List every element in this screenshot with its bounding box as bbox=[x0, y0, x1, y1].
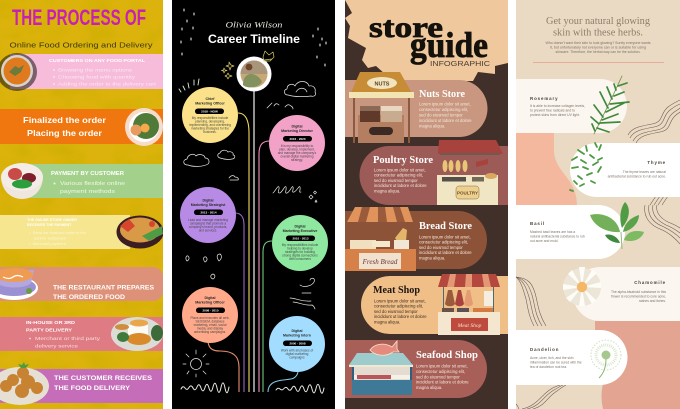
doodles bbox=[179, 9, 326, 393]
store band: nuts store: magna aliqua. bbox=[419, 124, 445, 128]
herb card: rosemary: protect skins from direct UV light. bbox=[530, 113, 580, 117]
herb card: basil bbox=[516, 202, 644, 259]
heading: career timeline: Career Timeline bbox=[208, 32, 300, 46]
circle: marketing strategist: Marketing Strategist bbox=[191, 203, 226, 207]
title: store guide: INFOGRAPHIC bbox=[430, 59, 491, 68]
store band: bread store bbox=[345, 207, 487, 271]
herb card: rosemary bbox=[516, 76, 629, 134]
store band: seafood shop: consectetur adipiscing elit, bbox=[416, 369, 465, 374]
circle: marketing officer: media, and display bbox=[197, 326, 224, 330]
icon: rosemary bbox=[591, 76, 629, 134]
nuts stall bbox=[349, 72, 414, 143]
store band: nuts store bbox=[345, 72, 488, 143]
circle: marketing director: and manage the company's bbox=[278, 151, 317, 155]
circle: marketing strategist: 2013 - 2014 bbox=[200, 210, 217, 214]
circle: marketing director: It is my responsibility to bbox=[281, 144, 313, 148]
step 3: payment by customer: Various flexible online bbox=[60, 181, 125, 187]
circle: marketing strategist bbox=[180, 187, 236, 243]
circle: marketing executive: Digital bbox=[295, 224, 305, 228]
store band: bread store: magna aliqua. bbox=[419, 256, 445, 260]
herb card: dandelion: Acne, ulcer, itch, and the skin bbox=[530, 356, 574, 360]
circle: marketing intern: Digital bbox=[292, 329, 302, 333]
circle: marketing executive: strategies for building bbox=[285, 250, 315, 254]
step 4: online store receives payment: RECEIVES THE PAYMENT bbox=[27, 223, 72, 227]
title: store guide: guide bbox=[410, 25, 488, 65]
step 7: the customer receives the food delivery: THE FOOD DELIVERY bbox=[54, 385, 131, 392]
herb card: dandelion: Dandelion bbox=[530, 347, 559, 352]
circle: marketing intern: Marketing Intern bbox=[283, 334, 311, 338]
store band: meat shop bbox=[361, 274, 508, 335]
store band: poultry store: magna aliqua. bbox=[374, 188, 400, 194]
herb card: chamomile: flower is recommended to cure acne, bbox=[611, 294, 666, 298]
circle: chief marketing officer: Marketing Officer bbox=[195, 102, 225, 106]
herb card: basil: Mashed basil leaves are has a bbox=[530, 230, 575, 234]
step 2: finalized the order: Placing the order bbox=[27, 128, 103, 138]
step 6: in-house or third party delivery bbox=[0, 317, 163, 351]
step 1: customers on any food portal: Browsing the menu options bbox=[58, 68, 133, 72]
circle: marketing executive: 2010 - 2013 bbox=[292, 236, 309, 240]
step 4: online store receives payment: • Send the finalized order to the bbox=[29, 230, 87, 235]
herb card: chamomile bbox=[563, 267, 680, 321]
store band: nuts store: Lorem ipsum dolor sit amet, bbox=[419, 102, 471, 106]
peach shape bbox=[516, 133, 577, 207]
circle: marketing intern: 2000 - 2008 bbox=[289, 342, 306, 346]
meat stall: Meat Shop bbox=[457, 323, 482, 329]
store band: bread store: Lorem ipsum dolor sit amet, bbox=[419, 234, 471, 240]
step 7: the customer receives the food delivery bbox=[0, 362, 163, 405]
step 4: online store receives payment: partner restaurant bbox=[34, 236, 67, 240]
circle: marketing executive: helping to develop bbox=[287, 246, 313, 250]
bread stall bbox=[345, 207, 416, 271]
store band: poultry store bbox=[360, 140, 508, 205]
store band: poultry store: consectetur adipiscing elit, bbox=[374, 172, 423, 178]
step 1: customers on any food portal: Adding the order to the delivery cart bbox=[58, 82, 157, 86]
step 7: the customer receives the food delivery: THE CUSTOMER RECEIVES bbox=[54, 375, 152, 382]
circle: marketing intern: Work with all phases of bbox=[281, 348, 313, 352]
herb card: chamomile: Chamomile bbox=[634, 280, 666, 285]
herb card: basil: out acne and mold. bbox=[530, 239, 559, 243]
store band: poultry store: Poultry Store bbox=[373, 155, 433, 166]
panel: online food ordering process bbox=[0, 0, 164, 409]
step 2: finalized the order: Finalized the order bbox=[23, 115, 107, 125]
circle: marketing strategist: and services. bbox=[199, 228, 217, 232]
salmon block bbox=[595, 321, 680, 409]
herb card: rosemary: It is able to increase collagen levels, bbox=[530, 104, 585, 108]
circle: marketing strategist: Digital bbox=[203, 198, 213, 202]
store band: poultry store: incididunt ut labore et dolore bbox=[374, 183, 427, 188]
step 6: in-house or third party delivery: IN-HOUSE OR 3RD bbox=[26, 320, 76, 325]
icon: dandelion bbox=[591, 340, 621, 378]
store band: seafood shop: Seafood Shop bbox=[416, 350, 478, 361]
herb card: chamomile: The alpha-bisabolol substance in this bbox=[611, 290, 666, 294]
store band: nuts store: incididunt ut labore et dolore bbox=[419, 118, 472, 123]
herb card: thyme bbox=[570, 143, 680, 197]
poultry stall: POULTRY bbox=[457, 190, 478, 196]
store band: bread store: Bread Store bbox=[419, 221, 472, 232]
herb card: rosemary: to prevent free radicals and to bbox=[530, 108, 575, 112]
herb card: thyme: The thyme leaves are natural bbox=[623, 170, 666, 174]
wavy lines bbox=[516, 100, 680, 409]
circle: marketing intern: digital marketing bbox=[286, 352, 309, 356]
store band: nuts store: Nuts Store bbox=[419, 89, 465, 100]
timeline lines bbox=[208, 90, 298, 392]
circle: marketing executive: My responsibilities include bbox=[282, 243, 318, 247]
store band: seafood shop: incididunt ut labore et dolore bbox=[416, 380, 469, 384]
title: the process of: THE PROCESS OF bbox=[12, 5, 146, 30]
herb card: basil: natural antibacterial substance to rub bbox=[530, 234, 585, 238]
circle: marketing officer: Marketing Officer bbox=[195, 300, 225, 304]
peach torn header bbox=[345, 0, 508, 81]
circle: marketing director: 2016 - 2020 bbox=[289, 137, 306, 141]
circle: marketing officer: 2008 - 2010 bbox=[202, 308, 219, 312]
herb card: rosemary: Rosemary bbox=[530, 96, 558, 101]
circle: marketing director bbox=[269, 115, 325, 171]
name script: Olivia Wilson bbox=[226, 20, 282, 30]
circle: marketing intern bbox=[269, 316, 325, 372]
step 6: in-house or third party delivery: delivery service bbox=[35, 344, 78, 350]
step 3: payment by customer bbox=[1, 163, 163, 199]
step 1: customers on any food portal: Choosing food with quantity bbox=[58, 74, 136, 80]
herb card: dandelion bbox=[516, 330, 628, 385]
store band: bread store: consectetur adipiscing elit, bbox=[419, 240, 468, 244]
circle: chief marketing officer bbox=[182, 87, 238, 143]
nuts stall: NUTS bbox=[375, 82, 390, 88]
store band: meat shop: sed do eiusmod tempor bbox=[374, 309, 418, 314]
circle: marketing director: Digital bbox=[292, 124, 302, 128]
step 6: in-house or third party delivery: PARTY DELIVERY bbox=[26, 328, 72, 332]
herb card: dandelion: tea of dandelion root tea. bbox=[530, 365, 567, 369]
bread stall: Fresh Bread bbox=[362, 258, 398, 266]
store band: nuts store: consectetur adipiscing elit, bbox=[419, 107, 468, 112]
heading: skin with these herbs. bbox=[553, 28, 643, 38]
step 4: online store receives payment: • Merchant payment bbox=[29, 241, 67, 246]
store band: seafood shop bbox=[345, 340, 487, 398]
intro text bbox=[546, 41, 651, 54]
herb card: chamomile: rashes and itches. bbox=[639, 299, 666, 303]
circle: marketing officer: Digital bbox=[205, 296, 215, 300]
circle: marketing executive: Marketing Executive bbox=[283, 229, 317, 233]
circle: marketing officer: SEO/SEM, database bbox=[196, 320, 225, 324]
step 5: the restaurant prepares the ordered food: THE ORDERED FOOD bbox=[53, 294, 126, 301]
title: store guide: store bbox=[369, 11, 443, 44]
portrait bbox=[236, 56, 272, 92]
store band: seafood shop: sed do eiusmod tempor bbox=[416, 374, 460, 380]
step 5: the restaurant prepares the ordered food: THE RESTAURANT PREPARES bbox=[53, 284, 154, 292]
herb card: basil: Basil bbox=[530, 221, 545, 226]
circle: chief marketing officer: planning, developing, bbox=[195, 120, 225, 124]
meat stall bbox=[438, 274, 500, 335]
circle: marketing officer bbox=[182, 287, 238, 343]
circle: chief marketing officer: implementing, and overseeing bbox=[189, 123, 231, 127]
circle: marketing director: strategy. bbox=[291, 158, 303, 162]
intro text: Who doesn't want their skin to look glowing? Surely everyone wants bbox=[546, 41, 651, 45]
store band: meat shop: magna aliqua. bbox=[374, 320, 400, 324]
circle: chief marketing officer: business. bbox=[203, 130, 217, 134]
circle: chief marketing officer: My responsibilities include bbox=[192, 116, 228, 120]
seafood stall bbox=[349, 341, 413, 395]
step 4: online store receives payment: THE ONLINE STORE OWNER bbox=[27, 218, 77, 222]
title: store guide bbox=[369, 11, 491, 68]
circle: marketing intern: campaigns bbox=[289, 356, 305, 360]
circle: marketing officer: marketing, email, social bbox=[194, 323, 227, 327]
store band: bread store: sed do eiusmod tempor bbox=[419, 245, 463, 250]
step 3: payment by customer: PAYMENT BY CUSTOMER bbox=[51, 171, 124, 177]
circle: marketing director: Marketing Director bbox=[281, 129, 313, 133]
store band: poultry store: sed do eiusmod tempor bbox=[374, 178, 418, 183]
icon: thyme bbox=[570, 143, 602, 191]
circle: marketing director: overall digital marketing bbox=[280, 154, 314, 158]
circle: marketing officer: Plans and executes all web, bbox=[191, 316, 230, 320]
step 1: customers on any food portal bbox=[0, 53, 163, 91]
store band: poultry store: Lorem ipsum dolor sit amet, bbox=[374, 168, 426, 172]
store band: nuts store: sed do eiusmod tempor bbox=[419, 112, 463, 118]
poultry stall bbox=[437, 140, 503, 205]
store band: meat shop: Lorem ipsum dolor sit amet, bbox=[374, 298, 426, 304]
circle: marketing strategist: company's brand, products, bbox=[189, 225, 227, 229]
herb card: thyme: Thyme bbox=[647, 160, 666, 165]
circle: marketing executive: strong digital connections bbox=[282, 254, 318, 258]
circle: chief marketing officer: marketing strategies for the bbox=[191, 126, 229, 130]
circle: chief marketing officer: 2018 - NOW bbox=[201, 110, 218, 114]
step 5: the restaurant prepares the ordered food bbox=[0, 267, 163, 301]
circle: marketing executive: with consumers bbox=[289, 257, 311, 261]
store band: meat shop: Meat Shop bbox=[373, 285, 420, 296]
circle: marketing executive bbox=[272, 215, 328, 271]
heading bbox=[546, 16, 651, 38]
circle: marketing strategist: Lead and manage marketing bbox=[188, 218, 228, 222]
store band: meat shop: incididunt ut labore et dolore bbox=[374, 314, 427, 319]
herb card: dandelion: inflammation can be cured with the bbox=[530, 360, 582, 364]
store band: seafood shop: magna aliqua. bbox=[416, 385, 442, 390]
step 4: online store receives payment bbox=[0, 215, 164, 249]
circle: marketing officer: advertising campaigns. bbox=[194, 330, 226, 334]
step 6: in-house or third party delivery: Merchant or third party bbox=[35, 336, 101, 342]
step 2: finalized the order bbox=[0, 108, 163, 146]
icon: chamomile bbox=[563, 267, 601, 306]
step 1: customers on any food portal: CUSTOMERS ON ANY FOOD PORTAL bbox=[49, 58, 145, 63]
heading: Get your natural glowing bbox=[546, 16, 651, 27]
step 3: payment by customer: payment methods bbox=[60, 189, 116, 195]
intro text: it, but unfortunately not everyone can or is suitable for using bbox=[550, 46, 646, 50]
panel: natural glowing skin herbs bbox=[516, 0, 680, 409]
panel: store guide bbox=[345, 0, 508, 409]
intro text: skincare. Therefore, the herbal way can be the solution. bbox=[556, 50, 641, 54]
panel: career timeline bbox=[172, 0, 335, 409]
circle: marketing strategist: campaigns that promote a bbox=[190, 222, 226, 226]
store band: meat shop: consectetur adipiscing elit, bbox=[374, 304, 423, 308]
circle: marketing director: plan, develop, implement, bbox=[279, 148, 315, 152]
subtitle: Online Food Ordering and Delivery bbox=[10, 40, 153, 50]
icon: basil bbox=[590, 202, 644, 249]
store band: bread store: incididunt ut labore et dolore bbox=[419, 250, 472, 255]
circle: chief marketing officer: Chief bbox=[206, 97, 215, 101]
store band: seafood shop: Lorem ipsum dolor sit amet, bbox=[416, 364, 468, 368]
herb card: thyme: antibacterial substance to rub out acne. bbox=[608, 174, 666, 178]
